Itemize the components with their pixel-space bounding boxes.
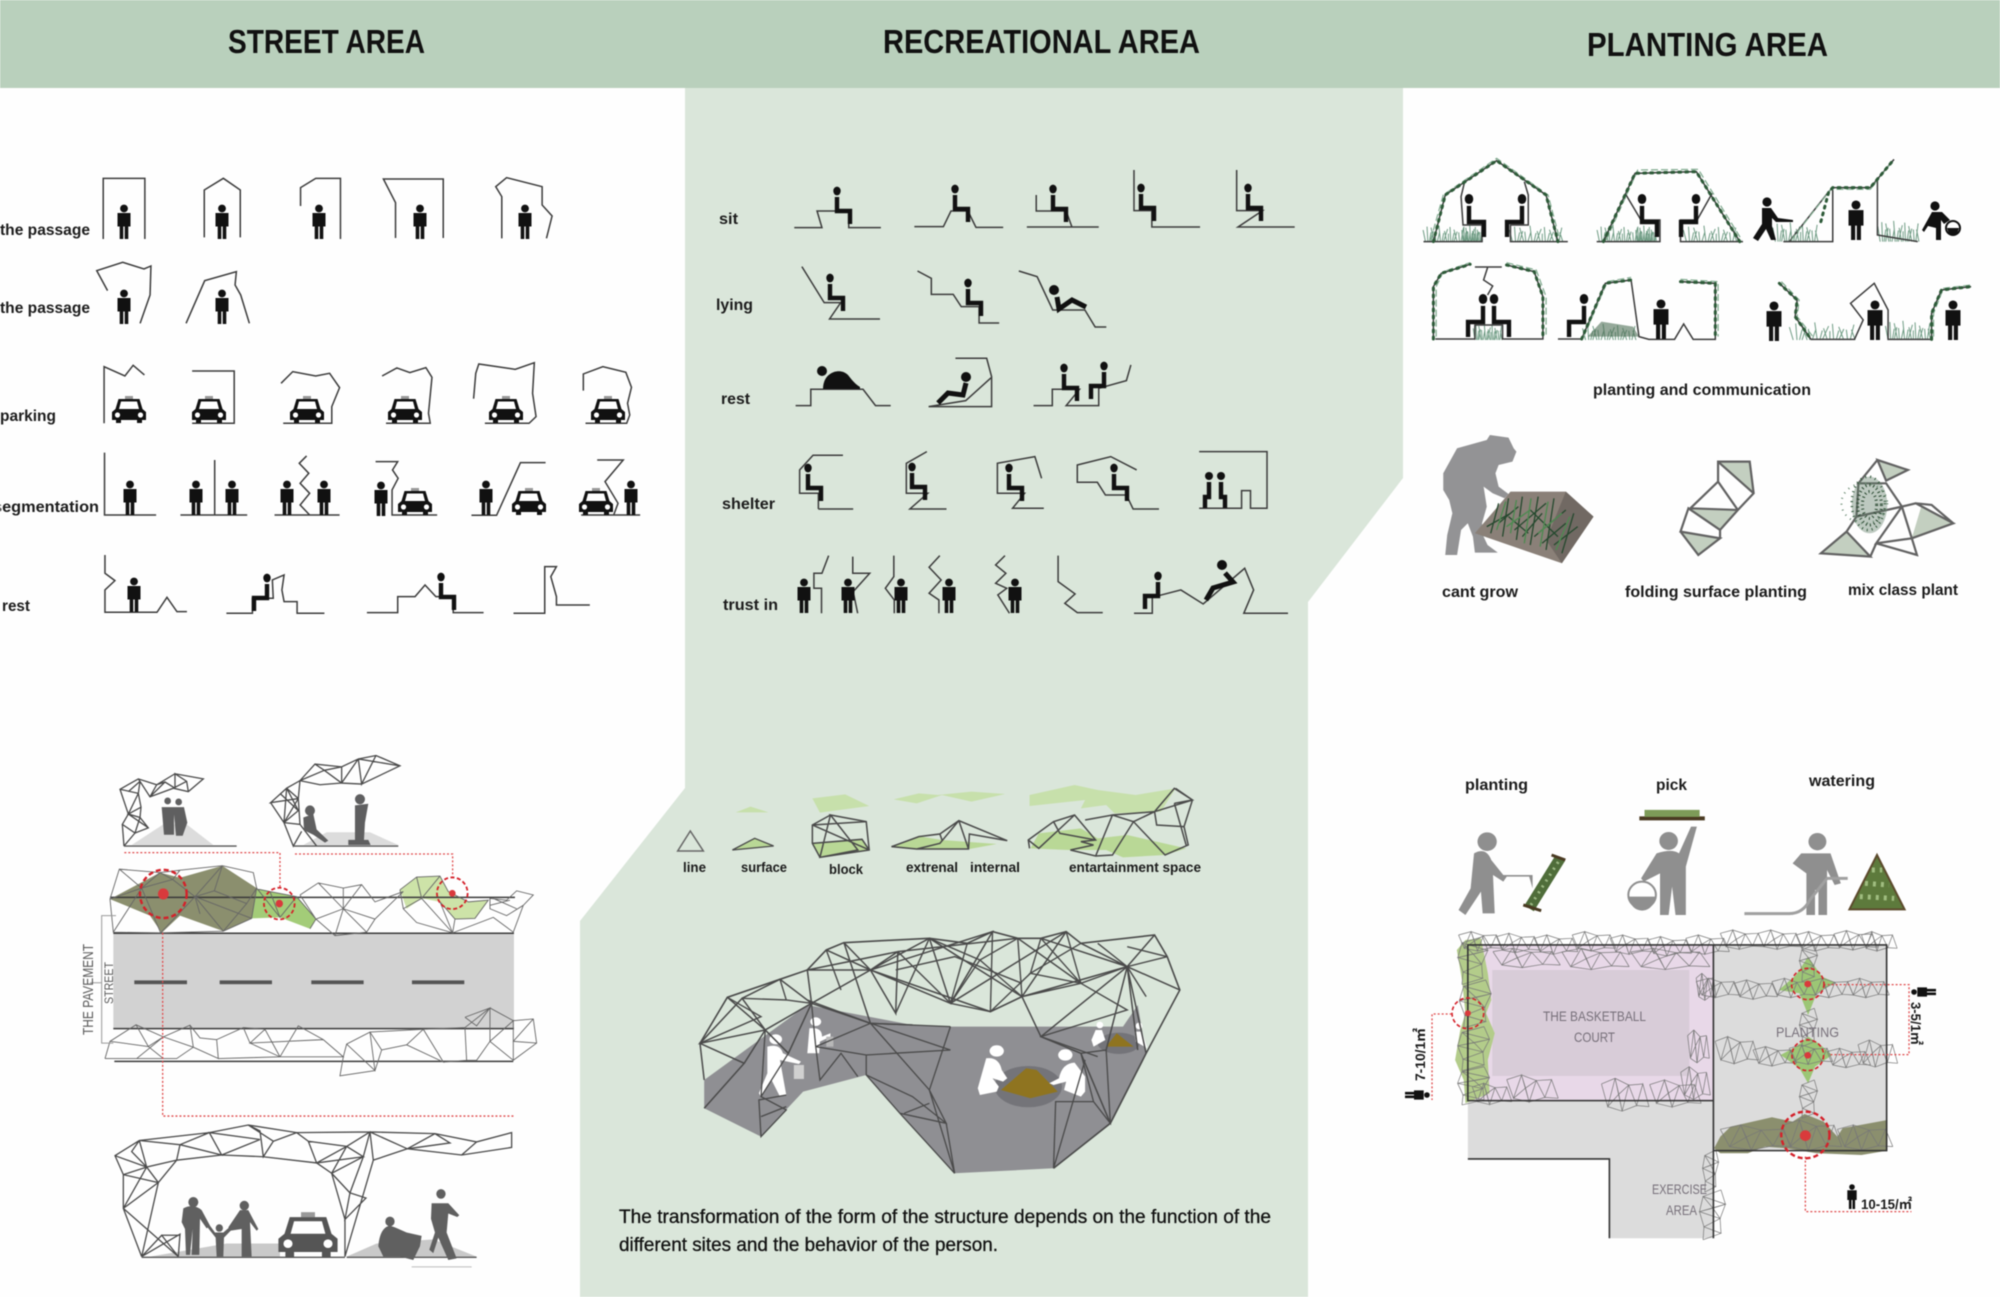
- labels: recreational rows: rest: [721, 391, 751, 408]
- density: 10-15 per square metre: 10-15/㎡: [1861, 1196, 1912, 1212]
- section: family, taxi and pedestrians under canopy: [115, 1125, 512, 1267]
- plan labels: EXERCISE: [1652, 1181, 1707, 1197]
- illustration: cant grow: [1443, 435, 1594, 563]
- chart: planting area site plan: [1432, 930, 1911, 1240]
- structure outlines: street rows: [97, 178, 640, 613]
- figures: activities: [1459, 813, 1905, 915]
- caption: planting and communication: planting and communication: [1593, 382, 1811, 399]
- labels: street rows: the passage: [0, 300, 90, 317]
- labels: form types: block: [829, 861, 863, 877]
- section: sitting and standing women: [271, 755, 400, 846]
- caption: mix class plant: mix class plant: [1848, 582, 1959, 599]
- text block: transformation description: different sites and the behavior of the person.: [619, 1235, 998, 1256]
- labels: recreational rows: sit: [719, 211, 739, 228]
- icon: taxi silhouette: [278, 1212, 338, 1257]
- heading: recreational area: RECREATIONAL AREA: [883, 23, 1200, 60]
- labels: activities: planting: [1465, 777, 1528, 794]
- figures: street people and taxis: [112, 205, 638, 612]
- density: 7-10 per square metre: [1405, 1028, 1430, 1100]
- text block: transformation description: The transformation of the form of the structure depends on the function of the: [619, 1207, 1271, 1228]
- labels: form types: [683, 859, 1201, 877]
- section: couple under canopy: [120, 774, 237, 846]
- mesh bands: [1458, 930, 1898, 1240]
- plan labels: [1543, 1008, 1839, 1218]
- plan labels: COURT: [1574, 1029, 1615, 1045]
- panel: planting area behaviour icons: [1423, 158, 1971, 601]
- plan labels: PLANTING: [1776, 1024, 1839, 1040]
- caption: folding surface planting: folding surface planting: [1625, 584, 1807, 601]
- street plan: road with pavement: [90, 853, 537, 1116]
- labels: activities: pick: [1656, 777, 1687, 794]
- plan labels: THE BASKETBALL: [1543, 1008, 1646, 1024]
- diagrams: form evolution: [678, 785, 1192, 857]
- plan labels: AREA: [1666, 1202, 1698, 1218]
- labels: recreational rows: lying: [716, 297, 753, 314]
- label: the pavement: THE PAVEMENT: [80, 944, 97, 1035]
- legend: form types line surface block external internal entertainment: [678, 785, 1201, 877]
- structure outlines: recreational rows: [794, 170, 1295, 613]
- caption: cant grow: cant grow: [1442, 584, 1519, 601]
- mesh frame: [700, 932, 1180, 1173]
- heading: street area: STREET AREA: [228, 23, 425, 60]
- white figures: [759, 1017, 1147, 1097]
- panel: street area behaviour icons: [0, 178, 640, 615]
- ground and zones: [1455, 938, 1887, 1238]
- labels: street rows: the passage: [0, 222, 90, 239]
- labels: form types: internal: [970, 859, 1020, 875]
- labels: form types: entartainment space: [1069, 859, 1201, 875]
- labels: form types: line: [683, 859, 706, 875]
- label: street: STREET: [102, 961, 116, 1004]
- density: 3-5 per square metre: [1908, 987, 1936, 1045]
- fuzz and sand mound: [995, 1033, 1140, 1107]
- structures: planting arches with vines and grass: [1423, 158, 1971, 340]
- chart: street plan and sections: [90, 755, 537, 1267]
- figures: recreational people: [798, 184, 1261, 613]
- floor plane: [704, 1005, 1146, 1173]
- heading: planting area: PLANTING AREA: [1587, 26, 1828, 63]
- labels: street rows: rest: [2, 598, 31, 615]
- activities: planting, pick, watering: [1459, 773, 1905, 915]
- labels: activities: watering: [1808, 773, 1875, 790]
- illustration: mix class plant: [1821, 460, 1953, 557]
- density: 10-15 per square metre: [1847, 1184, 1912, 1212]
- labels: recreational rows: [716, 211, 778, 614]
- text block: transformation description: [619, 1207, 1271, 1256]
- figures: planting people: [1465, 194, 1960, 341]
- labels: street rows: parking: [0, 408, 56, 425]
- labels: form types: extrenal: [906, 859, 958, 875]
- panel: recreational behaviour icons: [716, 170, 1295, 614]
- illustration: entertainment space structure with figures: [700, 932, 1180, 1173]
- labels: street rows: [0, 222, 99, 615]
- labels: recreational rows: trust in: [723, 597, 778, 614]
- density: 3-5 per square metre: 3-5/1㎡: [1908, 1002, 1924, 1045]
- density: 7-10 per square metre: 7-10/1㎡: [1412, 1028, 1428, 1081]
- labels: recreational rows: shelter: [722, 496, 775, 513]
- panel: recreational area green background: [580, 88, 1403, 1297]
- illustration: folding surface planting: [1681, 462, 1754, 555]
- header band: [0, 0, 2000, 88]
- density callouts: [1432, 968, 1911, 1212]
- zone outlines: [1468, 945, 1887, 1238]
- labels: form types: surface: [741, 859, 787, 875]
- labels: activities: [1465, 773, 1875, 794]
